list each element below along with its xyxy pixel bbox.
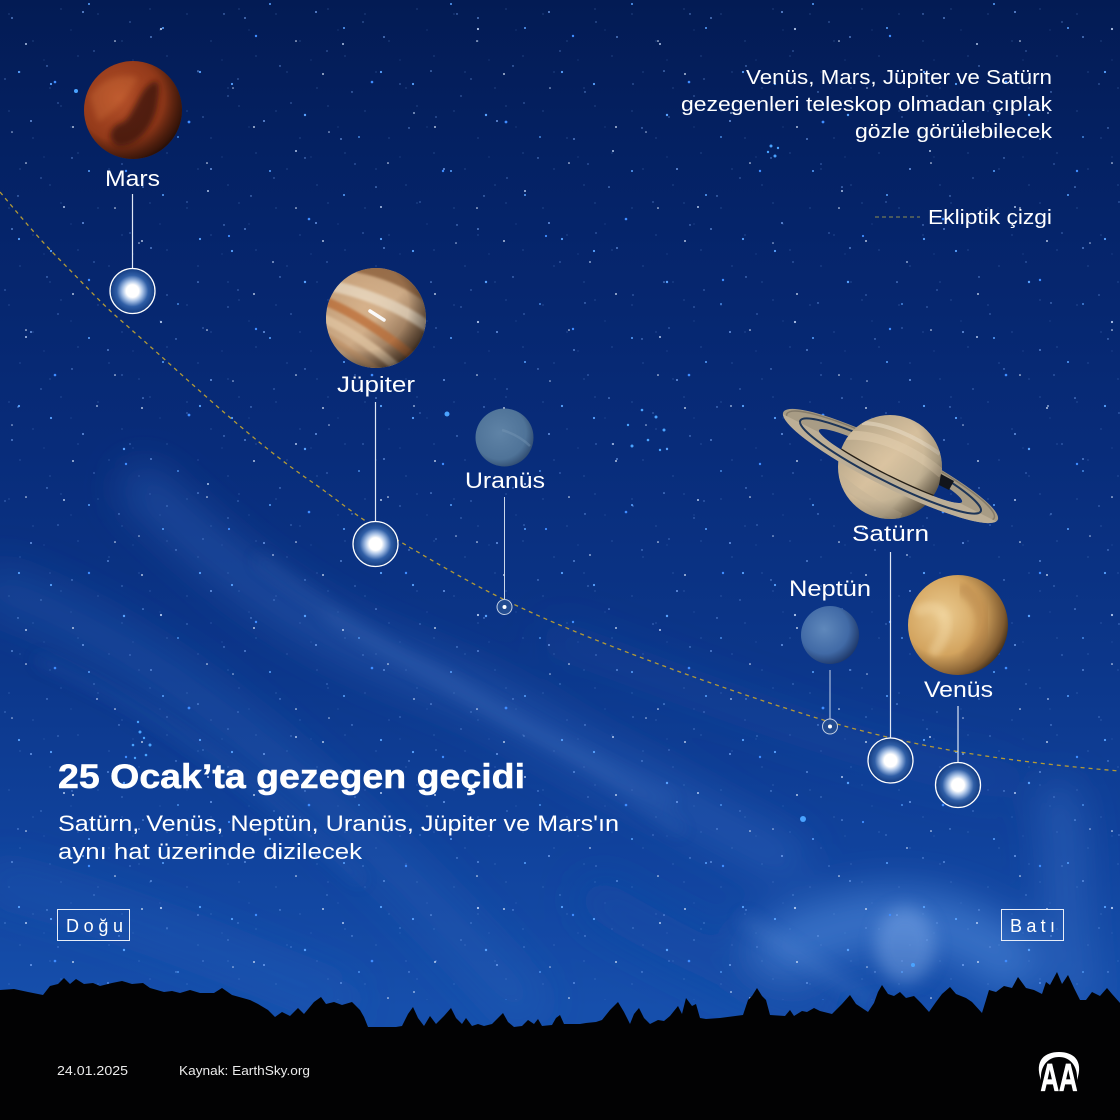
planet group: Saturn: Satürn — [852, 521, 929, 546]
subtitle: Satürn, Venüs, Neptün, Uranüs, Jüpiter ve Mars'ın — [58, 811, 619, 836]
ecliptic line — [0, 192, 1120, 771]
planet group: Saturn — [782, 408, 998, 784]
planet group: Mars: Mars — [105, 166, 160, 191]
subtitle: aynı hat üzerinde dizilecek — [58, 839, 363, 864]
label: west — [1002, 910, 1064, 940]
planet group: Uranus — [465, 408, 545, 614]
subtitle — [58, 811, 619, 864]
planet group: Neptune: Neptün — [789, 576, 871, 601]
top-right note: gezegenleri teleskop olmadan çıplak — [681, 94, 1053, 116]
icon: AA logo: AA — [1040, 1057, 1078, 1100]
label: west: Batı — [1010, 916, 1055, 936]
planet group: Venus — [908, 575, 1008, 808]
planet group: Neptune — [789, 576, 871, 734]
planet group: Mars — [84, 61, 182, 314]
planet group: Venus: Venüs — [924, 677, 993, 702]
footer: date: 24.01.2025 — [57, 1063, 128, 1078]
legend: ecliptic line: Ekliptik çizgi — [928, 207, 1052, 229]
planet group: Jupiter: Jüpiter — [337, 372, 415, 397]
top-right note — [681, 67, 1053, 143]
tree silhouette — [0, 972, 1120, 1120]
top-right note: Venüs, Mars, Jüpiter ve Satürn — [746, 67, 1052, 89]
footer: source: Kaynak: EarthSky.org — [179, 1063, 310, 1078]
planet group: Jupiter — [326, 268, 426, 568]
label: east: Doğu — [66, 916, 123, 936]
icon: AA logo — [1039, 1052, 1079, 1100]
top-right note: gözle görülebilecek — [855, 121, 1053, 143]
planet group: Uranus: Uranüs — [465, 468, 545, 493]
title: 25 Ocak’ta gezegen geçidi — [58, 758, 525, 796]
label: east — [58, 910, 130, 940]
